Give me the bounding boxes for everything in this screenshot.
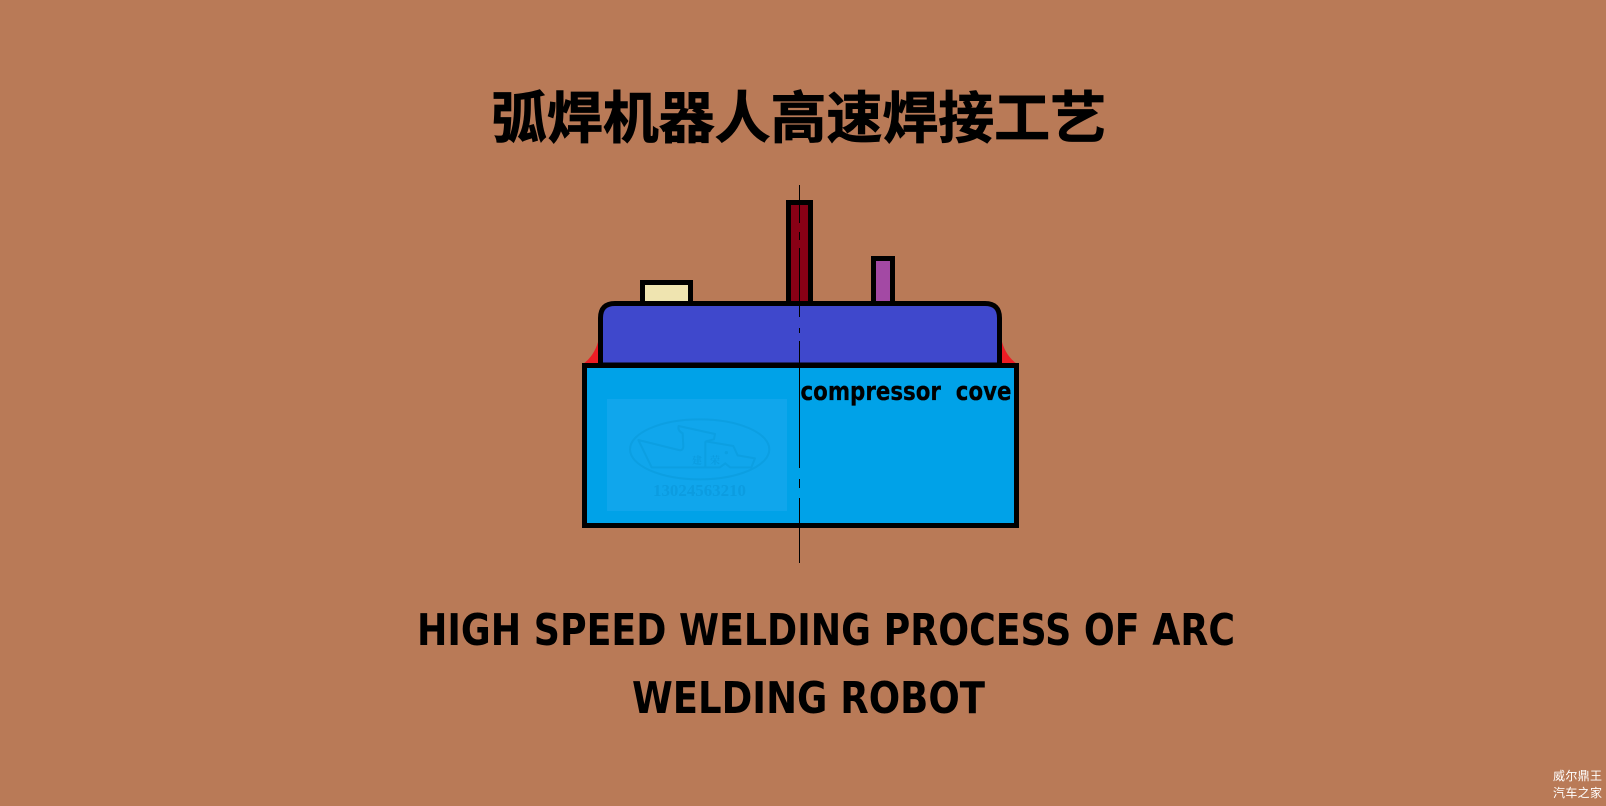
cyan compressor cover body [584, 366, 1016, 526]
title: 弧焊机器人高速焊接工艺 [491, 87, 1106, 150]
watermark: ship logo and phone number [607, 399, 787, 511]
dark red column [788, 202, 810, 304]
blue compressor upper housing [600, 304, 1000, 365]
watermark: source credit: 汽车之家 [1553, 785, 1602, 800]
watermark: ship logo and phone number: 建 [692, 454, 702, 467]
center line (dash-dot axis) [799, 185, 800, 563]
label: compressor cover: compressor cove [800, 377, 1012, 407]
watermark: source credit: 威尔鼎王 [1553, 768, 1602, 783]
english subtitle [417, 605, 1235, 724]
purple column [874, 258, 892, 304]
watermark: ship logo and phone number: 13024563210 [653, 481, 746, 500]
diagram: arc welding robot process [583, 185, 1017, 563]
red fillet right [1000, 342, 1017, 364]
watermark: ship logo and phone number: 荣 [710, 454, 720, 467]
red fillet left [583, 342, 600, 364]
english subtitle: WELDING ROBOT [632, 673, 985, 724]
watermark: source credit [1553, 768, 1602, 800]
english subtitle: HIGH SPEED WELDING PROCESS OF ARC [417, 605, 1235, 656]
cream block [642, 282, 690, 304]
